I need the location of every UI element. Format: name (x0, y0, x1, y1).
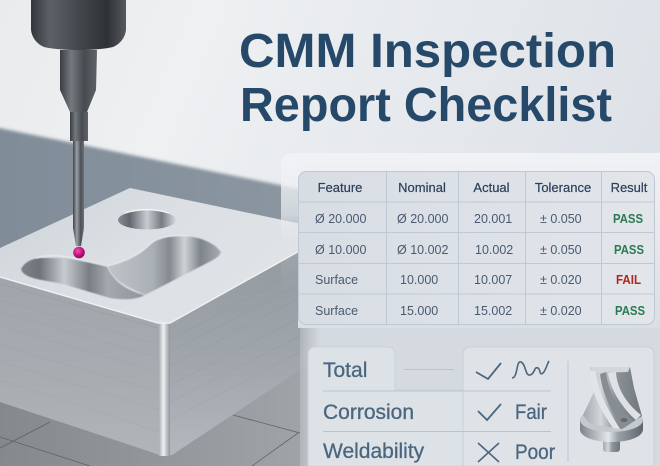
table row 4: 15.002 (474, 304, 512, 318)
flange top (580, 408, 643, 432)
block front face (0, 277, 163, 456)
table header row: Result (611, 180, 648, 195)
table row 1: PASS (613, 211, 643, 226)
icon: check mark total (476, 363, 501, 379)
table row 1: Ø 20.000 (315, 212, 366, 226)
title (239, 25, 616, 132)
probe stylus (73, 141, 84, 246)
frosted lower background (300, 328, 660, 466)
table header row: Tolerance (535, 180, 591, 195)
machined metal block (0, 188, 345, 456)
panel: material ratings (308, 347, 654, 466)
rating labels: Corrosion (323, 401, 414, 424)
large slot pocket (21, 235, 221, 299)
row dividers (323, 361, 568, 462)
right rating panel (463, 347, 654, 466)
icon: cross mark weldability (478, 443, 499, 462)
table row 3 (315, 272, 641, 287)
table row 4: Surface (315, 304, 358, 318)
stud (603, 436, 620, 452)
table row 2: Ø 10.000 (315, 243, 366, 257)
left tab panel (308, 347, 463, 466)
probe head (31, 0, 126, 50)
rating labels: Poor (515, 441, 555, 464)
floor grid surface (0, 340, 340, 466)
rating labels: Weldability (323, 440, 425, 463)
rating labels: Total (323, 359, 367, 382)
rating labels: Fair (515, 401, 547, 424)
table row 2: ± 0.050 (540, 243, 582, 257)
block right face (163, 223, 345, 456)
frosted surround (298, 153, 660, 328)
table row 2: PASS (614, 242, 644, 257)
table row 1: ± 0.050 (540, 212, 582, 226)
table row 3: 10.000 (400, 273, 438, 287)
probe shank (70, 112, 88, 141)
table header row: Nominal (398, 180, 446, 195)
table row 3: ± 0.020 (540, 273, 582, 287)
table row 2 (315, 242, 644, 257)
table row 1: 20.001 (474, 212, 512, 226)
small round pocket (118, 210, 176, 230)
icon: squiggle wave (512, 361, 549, 378)
helical body (583, 367, 642, 429)
table header row: Feature (318, 180, 362, 195)
panel: inspection table (281, 153, 660, 328)
table row 3: 10.007 (474, 273, 512, 287)
table row 4 (315, 303, 645, 318)
ruby ball (73, 247, 85, 258)
table row 4: PASS (615, 303, 645, 318)
table row 4: 15.000 (400, 304, 438, 318)
block top face (0, 188, 335, 323)
table row 3: FAIL (616, 272, 641, 287)
block corner highlight (159, 323, 170, 456)
table row 2: Ø 10.002 (397, 243, 448, 257)
icon: helical metal part (580, 367, 643, 452)
table row 2: 10.002 (475, 243, 513, 257)
rating labels (323, 359, 555, 464)
title: Report Checklist (240, 79, 612, 132)
probe collar (60, 50, 97, 112)
inspection table surface (0, 122, 340, 320)
table row 4: ± 0.020 (540, 304, 582, 318)
table frame and grid (298, 172, 654, 324)
table row 1 (315, 211, 643, 226)
frosted panel backing (281, 153, 298, 290)
table row 3: Surface (315, 273, 358, 287)
CMM probe (31, 0, 126, 258)
title: CMM Inspection (239, 25, 616, 78)
table header row: Actual (473, 180, 510, 195)
table header row (318, 180, 648, 195)
flange side (580, 420, 643, 442)
table row 1: Ø 20.000 (397, 212, 448, 226)
icon: check mark corrosion (478, 404, 501, 420)
